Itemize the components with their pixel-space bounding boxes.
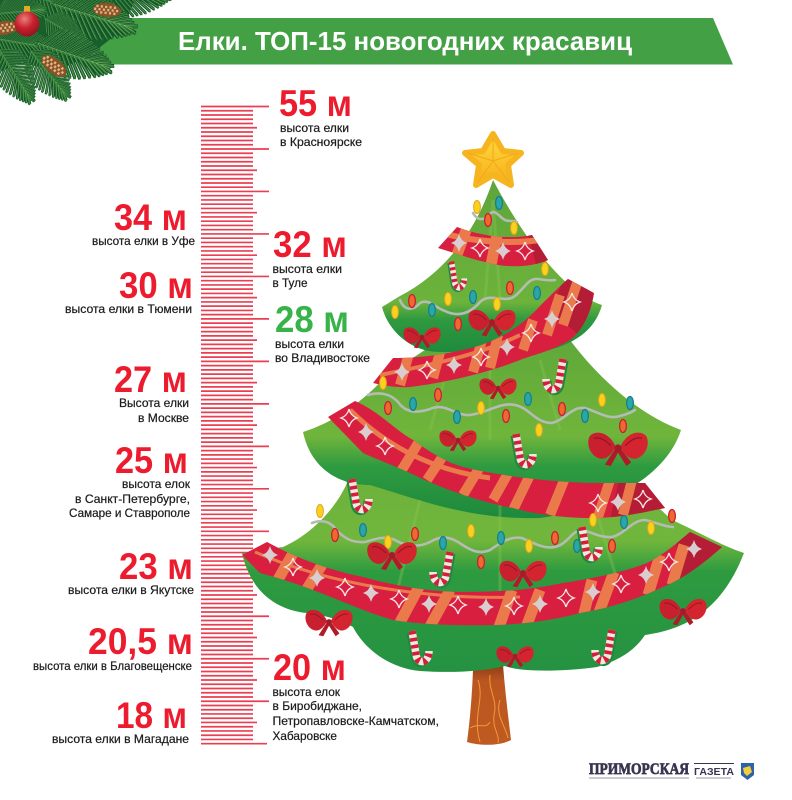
star topper xyxy=(465,134,521,185)
ribbon 2 xyxy=(373,279,594,388)
title banner xyxy=(95,18,733,64)
garlands xyxy=(312,212,673,552)
label: 20.5 m Blagoveshchensk xyxy=(33,621,193,673)
label: 20 m Birobidzhan, Petropavlovsk-Kamchatsky, Khabarovsk: Хабаровске xyxy=(272,729,337,743)
label: 28 m Vladivostok, highlighted green: во Владивостоке xyxy=(275,351,370,365)
label: 25 m Saint Petersburg, Samara, Stavropol: высота елок xyxy=(122,477,191,491)
label: 55 m Krasnoyarsk xyxy=(279,83,362,149)
newspaper logo: ГАЗЕТА xyxy=(694,766,734,778)
label: 30 m Tyumen xyxy=(65,265,193,316)
trunk xyxy=(467,665,511,745)
label: 55 m Krasnoyarsk: в Красноярске xyxy=(280,135,362,149)
label: 20 m Birobidzhan, Petropavlovsk-Kamchatsky, Khabarovsk: в Биробиджане, xyxy=(272,699,362,713)
label: 25 m Saint Petersburg, Samara, Stavropol: в Санкт-Петербурге, xyxy=(75,492,190,506)
label: 25 m Saint Petersburg, Samara, Stavropol: Самаре и Ставрополе xyxy=(69,506,190,520)
label: 23 m Yakutsk: 23 м xyxy=(119,546,193,587)
label: 28 m Vladivostok, highlighted green: высота елки xyxy=(275,337,344,351)
label: 18 m Magadan: высота елки в Магадане xyxy=(52,732,189,746)
label: 34 m Ufa: высота елки в Уфе xyxy=(92,234,195,248)
label: 20.5 m Blagoveshchensk: 20,5 м xyxy=(88,621,193,662)
top tier xyxy=(382,180,602,352)
label: 28 m Vladivostok, highlighted green xyxy=(275,299,370,365)
bows xyxy=(305,310,707,667)
label: 27 m Moscow: 27 м xyxy=(114,359,187,400)
pinecones xyxy=(0,2,122,81)
label: 27 m Moscow: Высота елки xyxy=(119,396,189,410)
christmas tree illustration xyxy=(240,134,744,745)
label: 30 m Tyumen: 30 м xyxy=(119,265,193,306)
label: 55 m Krasnoyarsk: 55 м xyxy=(279,83,352,124)
label: 25 m Saint Petersburg, Samara, Stavropol: 25 м xyxy=(115,440,188,481)
logo wordmark: ПРИМОРСКАЯ xyxy=(589,761,689,778)
label: 34 m Ufa xyxy=(92,197,195,248)
label: 55 m Krasnoyarsk: высота елки xyxy=(280,121,349,135)
newspaper logo xyxy=(589,761,754,780)
label: 32 m Tula: высота елки xyxy=(272,262,342,276)
label: 20 m Birobidzhan, Petropavlovsk-Kamchatsky, Khabarovsk: Петропавловске-Камчатском, xyxy=(272,714,439,728)
label: 27 m Moscow: в Москве xyxy=(138,411,189,425)
label: 23 m Yakutsk: высота елки в Якутске xyxy=(68,583,194,597)
label: 30 m Tyumen: высота елки в Тюмени xyxy=(65,302,192,316)
ribbon 4 xyxy=(242,532,722,626)
ribbon 1 xyxy=(438,227,548,266)
pine branch decoration with ornament xyxy=(0,0,172,114)
label: 20 m Birobidzhan, Petropavlovsk-Kamchatsky, Khabarovsk: 20 м xyxy=(273,647,346,688)
middle tier xyxy=(303,340,681,518)
label: 18 m Magadan xyxy=(52,695,189,746)
label: 34 m Ufa: 34 м xyxy=(114,197,187,238)
red ornament xyxy=(14,6,40,36)
label: 23 m Yakutsk xyxy=(68,546,194,597)
title: Елки. ТОП-15 новогодних красавиц xyxy=(178,26,632,56)
height ruler xyxy=(201,106,269,744)
label: 27 m Moscow xyxy=(114,359,189,425)
label: 20.5 m Blagoveshchensk: высота елки в Благовещенске xyxy=(33,659,192,673)
label: 32 m Tula: в Туле xyxy=(272,276,308,290)
label: 32 m Tula xyxy=(272,224,347,290)
logo shield xyxy=(741,763,754,780)
label: 25 m Saint Petersburg, Samara, Stavropol xyxy=(69,440,191,520)
label: 28 m Vladivostok, highlighted green: 28 м xyxy=(275,299,349,340)
label: 20 m Birobidzhan, Petropavlovsk-Kamchatsky, Khabarovsk: высота елок xyxy=(272,685,341,699)
bottom tier xyxy=(242,470,744,672)
garland bulbs xyxy=(317,196,675,568)
label: 20 m Birobidzhan, Petropavlovsk-Kamchatsky, Khabarovsk xyxy=(272,647,439,743)
label: 32 m Tula: 32 м xyxy=(273,224,347,265)
ribbon 3 xyxy=(328,401,665,518)
branch highlights xyxy=(395,200,620,600)
candy canes xyxy=(350,261,614,663)
label: 18 m Magadan: 18 м xyxy=(116,695,187,736)
